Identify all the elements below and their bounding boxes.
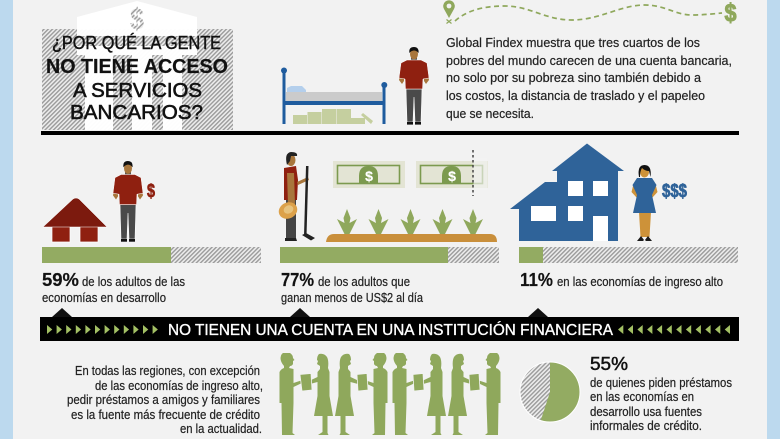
icon: red dollar: $	[147, 181, 155, 201]
title text	[46, 33, 228, 124]
banner bar	[40, 317, 739, 341]
title block with bank illustration	[42, 1, 233, 130]
intro text: pobres del mundo carecen de una cuenta bancaria,	[446, 54, 732, 68]
banner: no account	[40, 308, 739, 341]
icon: woman	[632, 165, 658, 241]
title text: A SERVICIOS	[73, 79, 202, 102]
caption 77%: 77%	[281, 270, 314, 290]
caption 11%	[520, 270, 723, 290]
caption 11%: 11%	[520, 270, 553, 290]
callout: 55 percent: informales de crédito.	[590, 419, 702, 433]
callout: 55 percent: de quienes piden préstamos	[590, 376, 732, 390]
title text: BANCARIOS?	[70, 101, 203, 124]
icon: man beside bed	[399, 47, 429, 125]
icon: map pin	[443, 0, 455, 18]
icon: hatched dollar sign: $	[130, 1, 144, 36]
callout: 55 percent: 55%	[590, 354, 628, 374]
caption 77%: ganan menos de US$2 al día	[281, 291, 423, 305]
caption 77%	[281, 270, 423, 305]
title text: NO TIENE ACCESO	[46, 55, 228, 78]
caption 77%: de los adultos que	[318, 275, 410, 289]
pointer triangles	[52, 308, 548, 317]
intro text: Global Findex muestra que tres cuartos de los	[446, 36, 700, 50]
icon: three blue dollars: $$$	[662, 181, 687, 201]
icon: dollar bill: $	[365, 168, 373, 184]
pie chart 55%	[520, 362, 580, 422]
right blue band	[767, 0, 780, 439]
icon: large blue house	[510, 144, 624, 241]
right arrows	[618, 325, 730, 334]
intro text: los costos, la distancia de traslado y el papeleo	[446, 89, 705, 103]
progress bar 77%	[280, 247, 499, 263]
text: informal borrowing	[67, 364, 263, 436]
intro text	[446, 36, 732, 121]
caption 59%: economías en desarrollo	[42, 291, 166, 305]
caption 11%: en las economías de ingreso alto	[557, 275, 723, 289]
panel: high income economies	[510, 144, 738, 290]
icon: small red house	[43, 198, 107, 242]
text: informal borrowing: en la actualidad.	[180, 422, 262, 436]
icon: farmer with hoe and hat	[276, 152, 315, 241]
icon: row of crops	[326, 209, 497, 242]
text: informal borrowing: En todas las regiones, con excepción	[75, 364, 260, 378]
progress bar 11%	[519, 247, 738, 263]
text: informal borrowing: de las economías de ingreso alto,	[95, 379, 263, 393]
hatched panel	[42, 29, 233, 130]
title text: ¿POR QUÉ LA GENTE	[52, 33, 221, 53]
icon: bank building	[77, 1, 197, 130]
caption 59%: de los adultos de las	[82, 275, 185, 289]
banner text: NO TIENEN UNA CUENTA EN UNA INSTITUCIÓN FINANCIERA	[168, 322, 614, 339]
caption 59%: 59%	[42, 270, 79, 290]
intro text: que se necesita.	[446, 107, 534, 121]
panel: developing economies	[42, 161, 261, 305]
callout: 55 percent	[590, 354, 732, 433]
text: informal borrowing: pedir préstamos a amigos y familiares	[67, 393, 260, 407]
door and windows	[531, 181, 608, 241]
progress bar 59%	[42, 247, 261, 263]
icon: people exchanging money	[280, 353, 500, 435]
text: informal borrowing: es la fuente más frecuente de crédito	[71, 408, 260, 422]
top section rule	[41, 131, 739, 135]
panel: adults earning under two dollars	[276, 150, 499, 305]
icon: partial dollar bill	[416, 150, 488, 196]
icon: partial dollar bill: $	[448, 168, 456, 184]
icon: route from pin to dollar	[443, 0, 737, 27]
icon: bed with money hidden underneath	[281, 68, 387, 124]
callout: 55 percent: desarrollo usa fuentes	[590, 405, 702, 419]
intro text: no solo por su pobreza sino también debido a	[446, 71, 701, 85]
icon: dollar bill	[333, 161, 405, 188]
icon: man	[113, 161, 143, 242]
left arrows	[47, 325, 158, 334]
left blue band	[0, 0, 13, 439]
caption 59%	[42, 270, 185, 305]
callout: 55 percent: en las economías en	[590, 390, 694, 404]
dashed route	[455, 5, 722, 21]
money stacks	[293, 109, 373, 124]
